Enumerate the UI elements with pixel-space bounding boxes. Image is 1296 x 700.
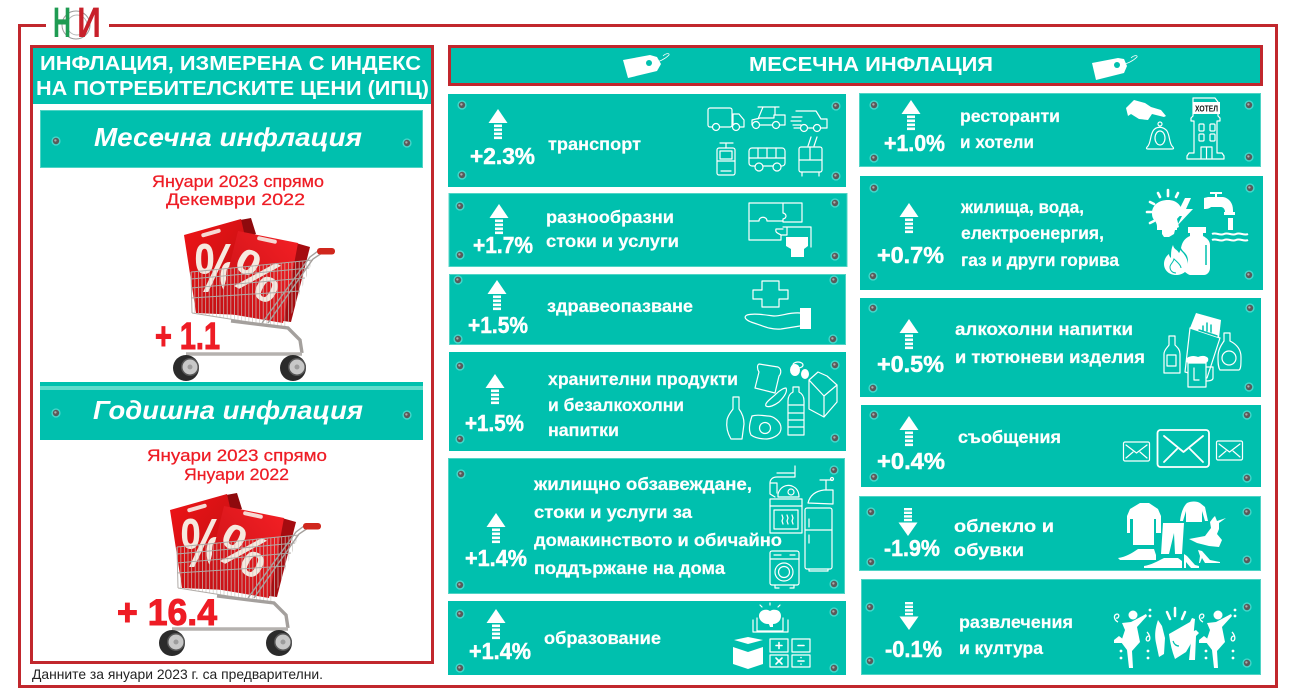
label: [960, 106, 1060, 152]
label: здравеопазване: [547, 296, 693, 316]
panel: index inflation: [32, 46, 432, 662]
row: restaurants and hotels: [860, 94, 1260, 166]
icon: clothes and shoes: [1118, 502, 1226, 568]
annual comparison period: [147, 446, 327, 484]
label: стоки и услуги: [546, 231, 679, 251]
label: жилища, вода,: [960, 197, 1084, 217]
row: food: [449, 352, 846, 451]
label: развлечения: [959, 612, 1073, 632]
icon: book, brain and calculator: [733, 603, 810, 669]
icon: vehicles: [708, 107, 827, 176]
label: разнообразни: [546, 207, 674, 227]
logo: Н: [53, 0, 71, 47]
arrow up: [488, 280, 506, 310]
label: напитки: [548, 420, 619, 440]
row: education: [448, 601, 846, 675]
arrow up: [486, 513, 506, 543]
value: +1.7%: [473, 232, 533, 258]
right heading: [450, 46, 1262, 84]
arrow up: [900, 319, 918, 349]
icon: energy, water and gas: [1147, 190, 1248, 275]
icon: cross on hand: [745, 281, 811, 329]
label: ресторанти: [960, 106, 1060, 126]
row: housing and utilities: [860, 176, 1263, 290]
panel heading: ИНФЛАЦИЯ, ИЗМЕРЕНА С ИНДЕКС: [40, 52, 421, 75]
arrow up: [900, 203, 918, 233]
label: поддържане на дома: [534, 558, 725, 578]
label: алкохолни напитки: [955, 319, 1133, 339]
band: monthly inflation: Месечна инфлация: [94, 122, 362, 152]
value: +1.4%: [469, 638, 531, 664]
icon: bottles, cigarettes and beer: [1164, 313, 1241, 387]
row: health: [450, 274, 846, 344]
label: облекло и: [954, 516, 1054, 536]
icon: envelopes: [1124, 430, 1242, 467]
arrow up: [900, 416, 918, 446]
arrow up: [902, 100, 920, 130]
label: [533, 474, 782, 578]
icon: price tag right: [1092, 56, 1137, 80]
annual value: + 16.4: [117, 592, 217, 633]
arrow down: [900, 602, 918, 630]
value: +2.3%: [470, 143, 535, 169]
value: +1.0%: [884, 130, 945, 156]
monthly comparison period: [152, 172, 324, 209]
icon: home appliances: [770, 466, 834, 588]
icon: shopping cart annual: [159, 493, 321, 656]
label: [959, 612, 1073, 658]
label: и култура: [959, 638, 1043, 658]
label: стоки и услуги за: [534, 502, 692, 522]
row: clothing and footwear: [860, 496, 1260, 570]
row: miscellaneous goods: [449, 194, 847, 266]
panel heading: [33, 48, 431, 104]
label: домакинството и обичайно: [534, 530, 782, 550]
band: annual inflation: [40, 382, 423, 440]
arrow up: [486, 374, 504, 404]
label: и хотели: [960, 132, 1034, 152]
arrow up: [490, 204, 508, 234]
monthly comparison period: Декември 2022: [166, 190, 305, 209]
footnote: Данните за януари 2023 г. са предварителни.: [32, 666, 323, 682]
row: recreation and culture: [862, 580, 1260, 674]
value: +1.5%: [465, 410, 524, 436]
value: +0.7%: [877, 242, 944, 268]
row: alcohol and tobacco: [860, 298, 1261, 397]
annual comparison period: Януари 2022: [184, 465, 289, 484]
label: [954, 516, 1054, 560]
band: monthly inflation: [40, 110, 422, 168]
arrow down: [898, 508, 918, 536]
icon: food items: [727, 362, 837, 439]
annual comparison period: Януари 2023 спрямо: [147, 446, 327, 465]
band: annual inflation: Годишна инфлация: [93, 395, 363, 425]
label: образование: [544, 628, 661, 648]
value: -1.9%: [884, 535, 940, 561]
icon: service bell and hotel: ХОТЕЛ: [1195, 104, 1218, 114]
label: [960, 197, 1119, 270]
row: household furnishings: [448, 458, 844, 594]
label: [548, 369, 738, 440]
label: съобщения: [958, 427, 1061, 447]
monthly comparison period: Януари 2023 спрямо: [152, 172, 324, 191]
label: [546, 207, 679, 251]
heading text: МЕСЕЧНА ИНФЛАЦИЯ: [749, 54, 993, 76]
icon: price tag left: [623, 54, 669, 78]
icon: dancers and masks: [1114, 608, 1236, 668]
label: хранителни продукти: [548, 369, 738, 389]
label: обувки: [954, 540, 1024, 560]
monthly value: + 1.1: [155, 316, 220, 358]
icon: shopping cart monthly: [173, 218, 335, 381]
icon: service bell and hotel: [1126, 98, 1224, 159]
label: електроенергия,: [961, 223, 1104, 243]
label: жилищно обзавеждане,: [533, 474, 752, 494]
value: -0.1%: [885, 636, 942, 662]
label: газ и други горива: [961, 250, 1119, 270]
arrow up: [488, 109, 508, 139]
arrow up: [486, 609, 506, 639]
value: +1.5%: [468, 312, 528, 338]
label: и безалкохолни: [548, 395, 684, 415]
label: и тютюневи изделия: [955, 347, 1145, 367]
icon: puzzle and hand: [749, 203, 811, 257]
value: +1.4%: [465, 545, 527, 571]
logo: И: [77, 0, 101, 47]
label: [955, 319, 1145, 367]
row: communications: [861, 405, 1261, 487]
panel heading: НА ПОТРЕБИТЕЛСКИТЕ ЦЕНИ (ИПЦ): [36, 77, 429, 100]
row: transport: [448, 94, 846, 187]
value: +0.5%: [877, 351, 944, 377]
label: транспорт: [548, 134, 641, 154]
value: +0.4%: [877, 448, 945, 474]
logo: [53, 0, 101, 47]
